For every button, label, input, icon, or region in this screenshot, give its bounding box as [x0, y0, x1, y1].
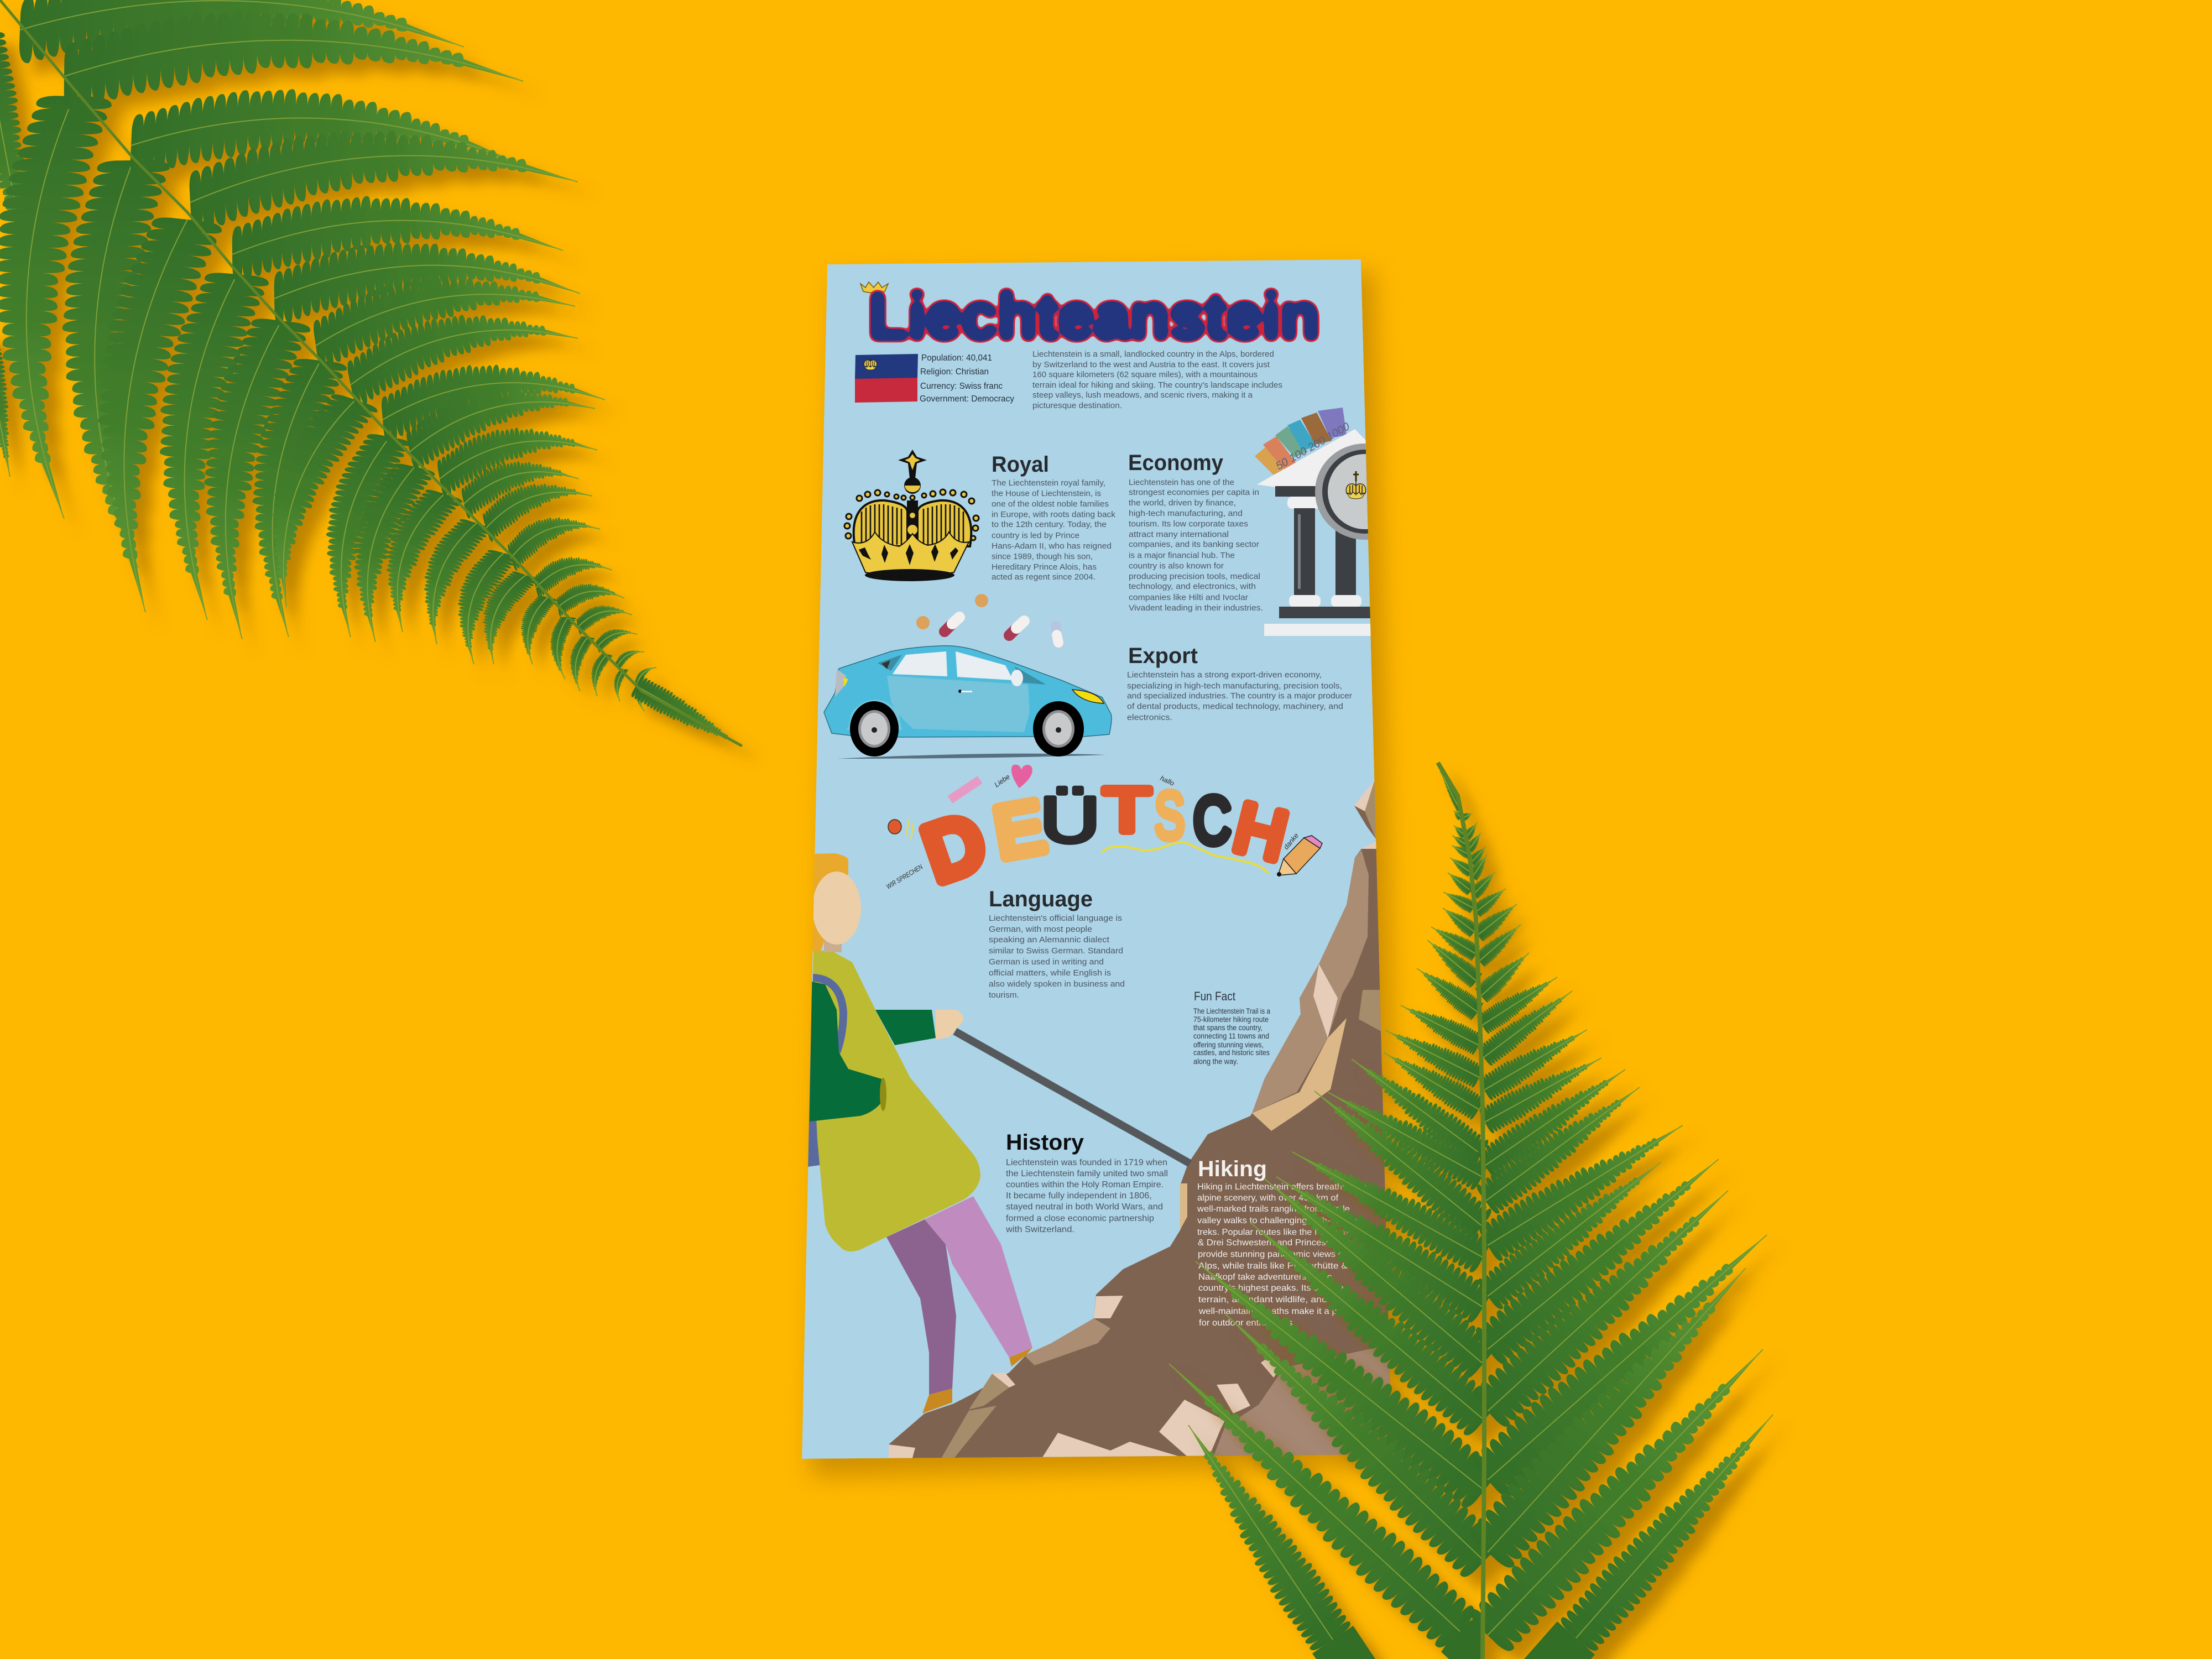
- Export heading: Export: [1128, 644, 1198, 668]
- hair: [812, 853, 848, 951]
- Economy text: Liechtenstein has one of the: [1129, 478, 1234, 487]
- intro text: by Switzerland to the west and Austria to the east. It covers just: [1032, 361, 1270, 369]
- History text: counties within the Holy Roman Empire.: [1006, 1180, 1164, 1190]
- peach facet: [1313, 964, 1338, 1038]
- hand: [936, 1010, 963, 1040]
- History text: with Switzerland.: [1005, 1225, 1074, 1234]
- Language text: German is used in writing and: [989, 958, 1104, 967]
- Economy text: companies like Hilti and Ivoclar: [1129, 593, 1248, 602]
- Hiking text: Hiking in Liechtenstein offers breathtaking: [1197, 1182, 1366, 1192]
- small scribbled words: Liebe: [993, 773, 1011, 789]
- Economy text: high-tech manufacturing, and: [1129, 509, 1243, 518]
- Hiking text: country's highest peaks. Its diverse: [1198, 1284, 1344, 1293]
- coat: [812, 951, 980, 1251]
- History text: formed a close economic partnership: [1006, 1214, 1154, 1223]
- rachis: [0, 0, 741, 745]
- Hiking text: for outdoor enthusiasts.: [1199, 1318, 1295, 1328]
- legs: [886, 1219, 956, 1395]
- Economy text: tourism. Its low corporate taxes: [1129, 520, 1248, 529]
- DEUTSCH lettering: [885, 765, 1322, 898]
- tan strip: [1180, 1183, 1187, 1230]
- Hiking text: terrain, abundant wildlife, and: [1198, 1295, 1327, 1305]
- lower rocks: [1094, 1296, 1123, 1318]
- Economy heading: Economy: [1128, 451, 1224, 475]
- History heading: History: [1006, 1130, 1084, 1155]
- Fun Fact text: 75-kilometer hiking route: [1193, 1015, 1269, 1024]
- Economy text: Vivadent leading in their industries.: [1129, 604, 1263, 613]
- DEUTSCH lettering: Ü: [1040, 783, 1100, 856]
- key facts: Religion: Christian: [920, 367, 989, 377]
- pencil: [1277, 836, 1322, 877]
- coin disc: [1315, 444, 1415, 540]
- banknote fan: [1255, 408, 1347, 474]
- Economy text: is a major financial hub. The: [1129, 551, 1235, 560]
- Fun Fact text: that spans the country,: [1193, 1024, 1262, 1032]
- intro text: Liechtenstein is a small, landlocked country in the Alps, bordered: [1032, 350, 1274, 359]
- Royal text: acted as regent since 2004.: [992, 573, 1095, 582]
- lobed tail: [630, 675, 747, 756]
- lower arm: [810, 982, 884, 1121]
- decorative pink bar: [950, 780, 980, 800]
- History text: the Liechtenstein family united two small: [1006, 1169, 1168, 1178]
- intro text: terrain ideal for hiking and skiing. The country's landscape includes: [1032, 381, 1282, 390]
- DEUTSCH lettering: WIR SPRECHEN: [885, 863, 925, 891]
- title crown icon: [860, 282, 888, 293]
- History text: [1005, 1158, 1168, 1234]
- flag: [855, 354, 918, 403]
- Hiking text: treks. Popular routes like the Fürstensteig: [1197, 1228, 1364, 1237]
- DEUTSCH lettering: S: [1155, 778, 1185, 853]
- mountain: [889, 780, 1399, 1460]
- icon: royal crown: [844, 450, 979, 581]
- Royal text: since 1989, though his son,: [992, 552, 1093, 561]
- title: Liechteanstein: [869, 280, 1319, 353]
- Economy text: strongest economies per capita in: [1129, 488, 1259, 497]
- Hiking text: valley walks to challenging high-altitude: [1197, 1216, 1360, 1225]
- Hiking text: Naafkopf take adventurers to the: [1198, 1272, 1332, 1282]
- pinna stems running off the bottom edge: [1312, 1615, 1595, 1659]
- yellow squiggle: [1102, 842, 1269, 874]
- tan ledge: [1252, 1018, 1347, 1131]
- top peak: [1354, 780, 1375, 811]
- Fun Fact text: connecting 11 towns and: [1193, 1032, 1269, 1040]
- Hiking text: well-maintained paths make it a paradise: [1198, 1307, 1368, 1316]
- DEUTSCH lettering: E: [989, 786, 1050, 873]
- key facts: [920, 353, 1014, 404]
- backpack: [807, 995, 820, 1167]
- Royal text: to the 12th century. Today, the: [992, 520, 1107, 529]
- paper shadow: [810, 271, 1405, 1477]
- Hiking text: provide stunning panoramic views of the: [1198, 1250, 1361, 1259]
- Royal text: The Liechtenstein royal family,: [992, 479, 1105, 488]
- Royal text: in Europe, with roots dating back: [992, 510, 1116, 519]
- icon: blue car: [824, 646, 1112, 759]
- intro text: [1032, 350, 1282, 410]
- Royal heading: Royal: [992, 452, 1049, 477]
- main rock mass: [889, 848, 1399, 1460]
- History text: stayed neutral in both World Wars, and: [1006, 1202, 1163, 1212]
- upper light facet: [1252, 850, 1369, 1113]
- Economy text: companies, and its banking sector: [1129, 540, 1259, 549]
- Royal text: country is led by Prince: [992, 531, 1079, 540]
- Economy text: producing precision tools, medical: [1129, 572, 1260, 581]
- pinnae pointing down: [0, 30, 648, 712]
- grey-tan facet: [1359, 990, 1384, 1033]
- strap: [813, 978, 843, 1052]
- neck: [824, 940, 842, 952]
- panel: poster sheet: [802, 259, 1415, 1460]
- Royal text: the House of Liechtenstein, is: [992, 489, 1101, 498]
- pearls: [844, 489, 979, 540]
- Fun Fact text: [1193, 1007, 1270, 1066]
- Language text: tourism.: [989, 991, 1019, 1000]
- Economy text: the world, driven by finance,: [1129, 499, 1236, 508]
- pinnae pointing right: [19, 0, 747, 756]
- Language text: Liechtenstein's official language is: [989, 914, 1122, 923]
- Fun Fact text: offering stunning views,: [1193, 1041, 1264, 1049]
- Fun Fact text: along the way.: [1193, 1057, 1238, 1066]
- intro text: 160 square kilometers (62 square miles), with a mountainous: [1032, 371, 1258, 379]
- Language text: German, with most people: [989, 925, 1092, 934]
- Royal text: [992, 479, 1116, 582]
- DEUTSCH lettering: T: [1103, 775, 1151, 844]
- Export text: of dental products, medical technology, machinery, and: [1127, 702, 1343, 711]
- History text: It became fully independent in 1806,: [1006, 1191, 1152, 1201]
- Hiking text: alpine scenery, with over 400 km of: [1197, 1193, 1339, 1203]
- key facts: Government: Democracy: [920, 394, 1014, 404]
- pocket: [880, 1078, 886, 1111]
- Export text: and specialized industries. The country is a major producer: [1127, 692, 1352, 701]
- Fun Fact text: castles, and historic sites: [1193, 1048, 1270, 1057]
- Hiking text: [1197, 1182, 1368, 1328]
- Royal text: Hans-Adam II, who has reigned: [992, 542, 1112, 551]
- History text: Liechtenstein was founded in 1719 when: [1006, 1158, 1167, 1167]
- Hiking text: Alps, while trails like Pfälzerhütte &: [1198, 1261, 1348, 1271]
- DEUTSCH lettering: H: [1227, 789, 1294, 875]
- face: [812, 872, 861, 945]
- DEUTSCH lettering: hallo: [1159, 774, 1176, 787]
- icon: coins and pills: [916, 594, 1058, 643]
- right pinnae: [1461, 810, 1792, 1656]
- cross on orb: [898, 450, 927, 478]
- boots: [922, 1389, 952, 1413]
- left pinnae: [1150, 769, 1503, 1653]
- hiker: [807, 853, 1032, 1413]
- Export text: specializing in high-tech manufacturing, precision tools,: [1127, 682, 1342, 691]
- raised sleeve: [875, 1010, 936, 1045]
- Economy text: technology, and electronics, with: [1129, 582, 1256, 591]
- rachis: [1438, 763, 1484, 1659]
- Export text: electronics.: [1127, 713, 1172, 722]
- dot and ticks: [888, 820, 901, 834]
- roof numerals: 50 100 200 1000: [1274, 420, 1352, 472]
- Economy text: attract many international: [1129, 530, 1229, 539]
- intro text: steep valleys, lush meadows, and scenic rivers, making it a: [1032, 391, 1253, 400]
- Language text: official matters, while English is: [989, 969, 1111, 978]
- Export text: Liechtenstein has a strong export-driven economy,: [1127, 671, 1322, 680]
- trekking pole: [955, 1031, 1190, 1164]
- Language text: speaking an Alemannic dialect: [989, 936, 1109, 945]
- key facts: Currency: Swiss franc: [920, 382, 1003, 391]
- heart: [1011, 765, 1032, 788]
- Language text: [989, 914, 1125, 1000]
- icon: bank with banknotes: [1255, 408, 1415, 636]
- Language heading: Language: [989, 887, 1093, 911]
- intro text: picturesque destination.: [1032, 401, 1122, 410]
- letters: D: [914, 797, 995, 898]
- arches: [854, 500, 907, 546]
- DEUTSCH lettering: danke: [1282, 832, 1300, 851]
- key facts: Population: 40,041: [921, 353, 992, 363]
- Economy text: [1129, 478, 1263, 613]
- Hiking text: well-marked trails ranging from gentle: [1197, 1204, 1350, 1214]
- Fun Fact heading: Fun Fact: [1194, 989, 1235, 1003]
- fern: top left: [0, 0, 747, 756]
- Export text: [1127, 671, 1352, 722]
- Language text: also widely spoken in business and: [989, 980, 1125, 989]
- Fun Fact text: The Liechtenstein Trail is a: [1193, 1007, 1270, 1015]
- Hiking heading: Hiking: [1198, 1157, 1267, 1181]
- base: [852, 532, 969, 577]
- DEUTSCH lettering: C: [1193, 784, 1231, 858]
- Royal text: Hereditary Prince Alois, has: [992, 563, 1097, 572]
- wheels: [850, 701, 899, 757]
- fern: bottom right: [1150, 763, 1792, 1659]
- Economy text: country is also known for: [1129, 562, 1224, 571]
- Royal text: one of the oldest noble families: [992, 500, 1109, 509]
- Hiking text: & Drei Schwestern and Princess Gina: [1198, 1238, 1353, 1248]
- Language text: similar to Swiss German. Standard: [989, 947, 1123, 956]
